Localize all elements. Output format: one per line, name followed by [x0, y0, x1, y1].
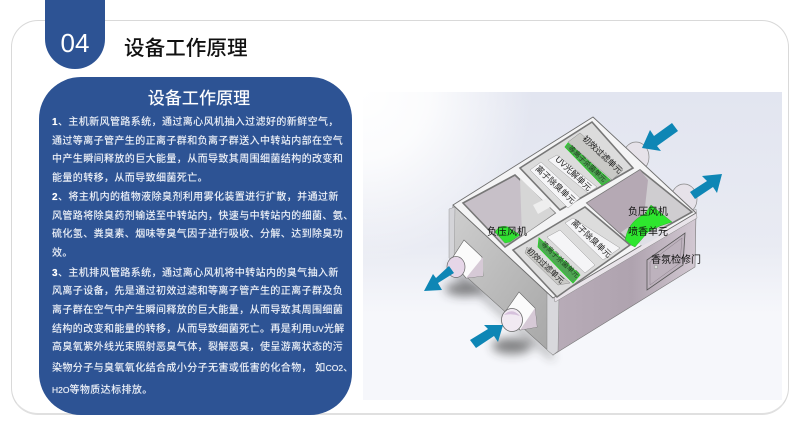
inlet duct	[502, 292, 537, 332]
icon: right fan	[625, 205, 672, 247]
arrow: front outlet	[424, 266, 454, 291]
label: fragrance unit: 喷香单元	[628, 226, 668, 238]
arrow: rear inlet	[642, 123, 678, 151]
text block: step 3: 高臭氧紫外线光束照射恶臭气体，裂解恶臭，使呈游离状态的污	[52, 342, 343, 353]
label: upper ion unit: 离子除臭单元	[533, 163, 578, 206]
text block: step 2: 风管路将除臭药剂输送至中转站内，快速与中转站内的细菌、氨、	[52, 211, 354, 222]
heading: 设备工作原理	[124, 37, 248, 60]
label: left fan: 负压风机	[487, 225, 527, 238]
housing: top frame	[453, 117, 696, 298]
text block: step 2: 硫化氢、粪臭素、烟味等臭气因子进行吸收、分解、达到除臭功	[52, 229, 343, 240]
number tab: 04	[61, 28, 89, 58]
text block: step 1: 中产生瞬间释放的巨大能量，从而导致其周围细菌结构的改变和	[52, 154, 343, 165]
text block: step 3: 离子群在空气中产生瞬间释放的巨大能量，从而导致其周围细菌	[52, 305, 343, 316]
ground shadows	[445, 264, 553, 360]
text block: step 1	[52, 116, 343, 184]
rear air ducts	[623, 142, 697, 214]
image background	[363, 92, 782, 400]
label: upper primary filter: 初效过滤单元	[580, 133, 625, 176]
number tab	[45, 0, 105, 69]
label: upper UV unit: UV光解单元	[553, 154, 594, 193]
arrow: front inlet	[470, 325, 503, 348]
text block: step 2: 效。	[52, 248, 73, 259]
text block: step 3: 染物分子与臭氧氧化结合成小分子无害或低害的化合物， 如CO2、	[52, 363, 353, 374]
text block: step 3: H2O等物质达标排放。	[52, 385, 153, 396]
icon: left fan	[495, 226, 520, 243]
service door	[647, 233, 685, 290]
figure: equipment 3D model	[363, 92, 782, 400]
text block: step 3: 结构的改变和能量的转移，从而导致细菌死亡。再是利用UV光解	[52, 324, 345, 335]
text block: step 2	[52, 190, 354, 259]
label: lower plasma unit: 等离子杀菌单元	[539, 240, 581, 280]
outlet duct	[447, 240, 483, 278]
housing: side faces	[449, 205, 697, 355]
text block: step 1: 1、主机新风管路系统，通过离心风机抽入过滤好的新鲜空气，	[52, 117, 339, 128]
text block: step 2: 2、将主机内的植物液除臭剂利用雾化装置进行扩散，并通过新	[52, 192, 339, 203]
compartment: lower filter bay	[513, 207, 630, 297]
text block: step 3: 3、主机排风管路系统，通过离心风机将中转站内的臭气抽入新	[52, 268, 339, 279]
text block: step 3: 风离子设备，先是通过初效过滤和等离子管产生的正离子群及负	[52, 286, 343, 297]
text block: step 1: 通过等离子管产生的正离子群和负离子群送入中转站内部在空气	[52, 136, 343, 147]
arrow: rear outlet	[690, 174, 722, 199]
compartment: right fan bay	[587, 170, 692, 247]
panel: working principle	[39, 77, 352, 415]
compartment: upper filter bay	[520, 122, 633, 210]
compartment: left fan bay	[463, 175, 555, 247]
text block: step 1: 能量的转移，从而导致细菌死亡。	[52, 173, 208, 184]
label: lower ion unit: 离子除臭单元	[569, 217, 614, 260]
panel title: 设备工作原理	[148, 89, 250, 108]
label: upper plasma unit: 等离子杀菌单元	[566, 144, 608, 184]
label: service door: 香氛检修门	[651, 253, 701, 266]
label: right fan: 负压风机	[628, 205, 668, 218]
label: lower primary filter: 初效过滤单元	[525, 245, 567, 285]
text block: step 3	[52, 266, 353, 396]
